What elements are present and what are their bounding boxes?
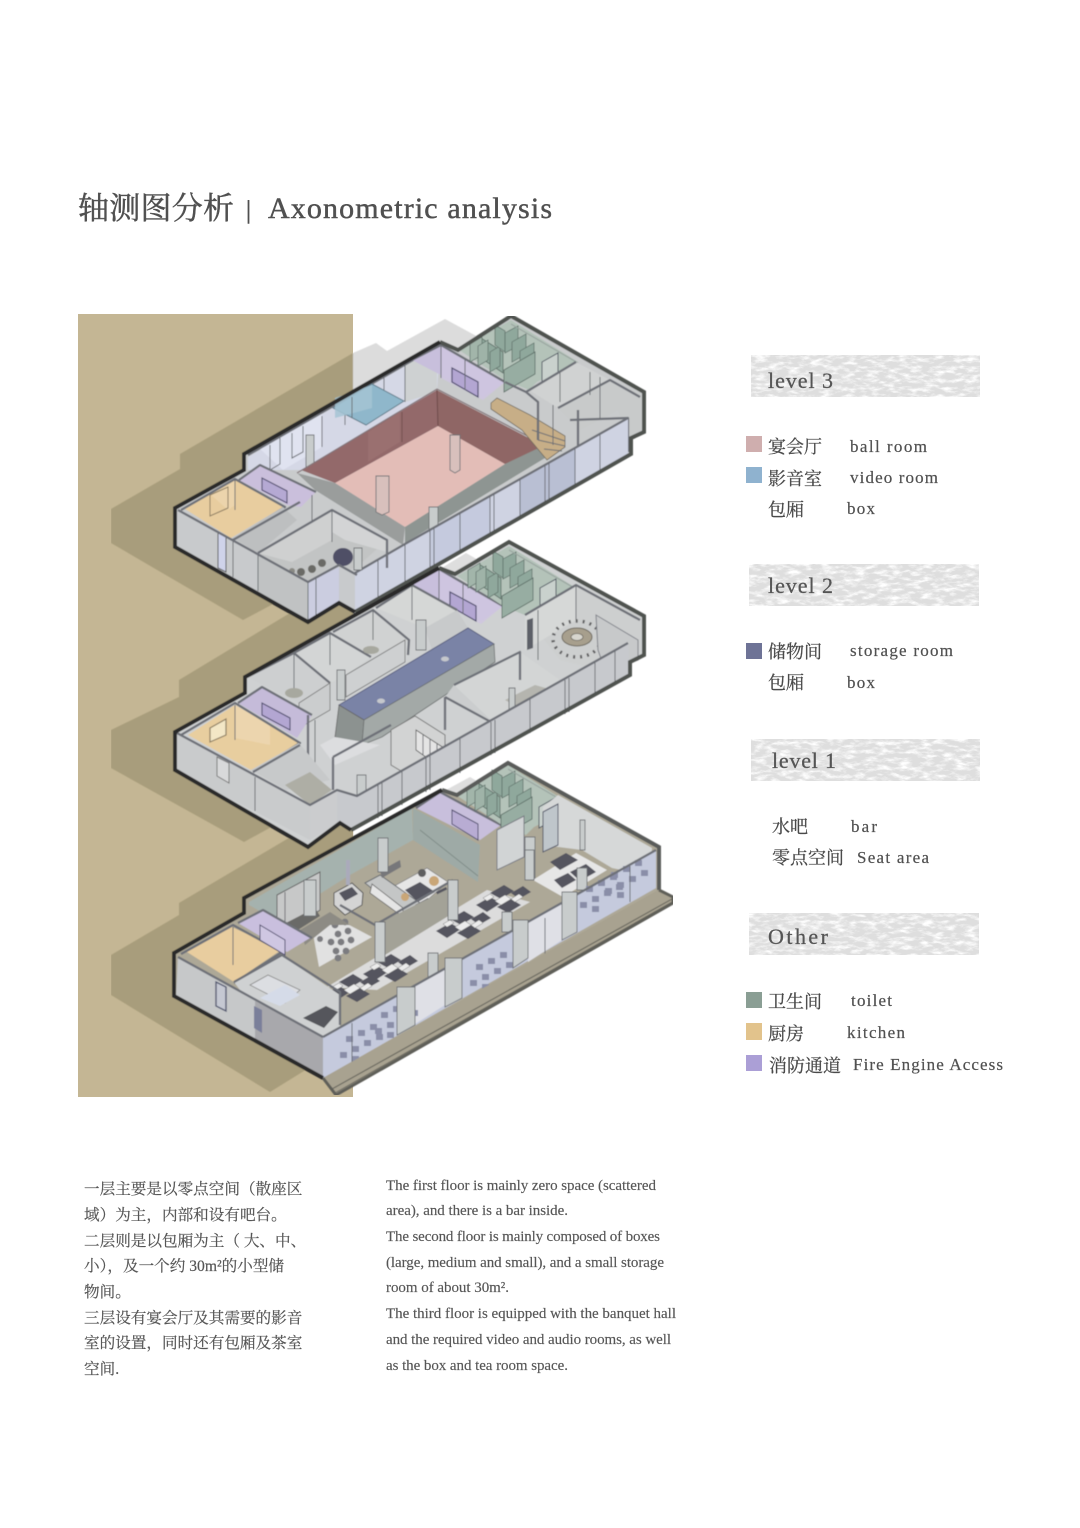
axonometric drawing [111, 316, 673, 1095]
chinese description: 室的设置，同时还有包厢及茶室 [84, 1334, 302, 1352]
cast shadows [111, 319, 482, 1092]
legend: level 3 items: box [847, 499, 876, 518]
legend: level 2 items: box [847, 673, 876, 692]
rear box rooms level 2 [247, 585, 468, 728]
legend: level 3 items: video room [850, 468, 938, 487]
purple access lower level 2 [238, 687, 315, 785]
legend: level 1 items: Seat area [857, 848, 929, 867]
kitchen level 3 [181, 479, 285, 540]
dining clusters level 1 [325, 853, 596, 1002]
legend header: level 1: level 1 [772, 748, 836, 773]
rear glazed rooms [248, 346, 440, 470]
outer walls level 3 [175, 316, 644, 622]
legend header: level 2 [749, 564, 979, 606]
legend: level 1 items: 零点空间 [772, 848, 844, 868]
chinese description: 三层设有宴会厅及其需要的影音 [84, 1309, 302, 1327]
english description: The first floor is mainly zero space (scattered [386, 1178, 656, 1194]
legend header: level 2: level 2 [768, 573, 833, 598]
title: Axonometric analysis [268, 192, 552, 225]
legend header: level 1 [751, 739, 980, 781]
storage room [335, 628, 495, 745]
legend: other items [746, 991, 1003, 1076]
toilets level 3 [459, 320, 578, 392]
banquet room level 2 [525, 585, 642, 670]
chinese description: 一层主要是以零点空间（散座区 [84, 1180, 302, 1198]
room below kitchen level 2 [251, 743, 332, 805]
front glazing level 3 [355, 418, 628, 610]
ballroom walls [301, 390, 438, 483]
floor rugs [312, 853, 607, 990]
front left wall level 3 [177, 510, 357, 620]
english description: area), and there is a bar inside. [386, 1203, 568, 1219]
english description: The second floor is mainly composed of boxes [386, 1229, 660, 1245]
english description: as the box and tea room space. [386, 1358, 568, 1374]
column rear [306, 435, 314, 468]
chinese description: 小），及一个约 30m²的小型储 [84, 1257, 284, 1275]
back of house level 1 [234, 955, 340, 1037]
english description: The third floor is equipped with the banquet hall [386, 1306, 676, 1322]
right rear room level 1 [497, 795, 652, 880]
front wall left level 1 [176, 957, 323, 1078]
legend: other items: 厨房 [768, 1024, 804, 1044]
legend: level 2 items: storage room [850, 641, 953, 660]
toilets level 1 [456, 765, 575, 837]
box rooms level 3 [233, 502, 387, 582]
legend: level 2 items: 包厢 [768, 673, 804, 693]
front wall level 2 [175, 643, 630, 840]
legend: other items: 消防通道 [769, 1056, 841, 1076]
front glazing level 1 [323, 850, 656, 1078]
right rooms level 3 [505, 362, 641, 452]
bar and seating level 1 [334, 860, 450, 917]
bar stools level 1 [317, 919, 354, 961]
legend: level 3 items: 影音室 [768, 469, 822, 489]
legend: other items: toilet [851, 991, 892, 1010]
english description [386, 1178, 676, 1374]
chinese description [84, 1180, 306, 1378]
legend: level 1 items [772, 817, 929, 868]
level 1 floor plan [174, 763, 673, 1095]
legend: level 1 items: bar [851, 817, 877, 836]
legend: other items: kitchen [847, 1023, 906, 1042]
level 3 floor plan [175, 316, 644, 622]
base slab level 3 [175, 316, 644, 622]
ballroom low walls [297, 473, 405, 545]
shelves [491, 398, 565, 460]
level 2 floor plan [175, 542, 644, 847]
bar and corridor level 2 [320, 716, 445, 796]
ledge level 1 [323, 890, 673, 1095]
chinese description: 物间。 [84, 1283, 131, 1301]
legend: level 3 items: 宴会厅 [768, 437, 822, 457]
shelving level 1 [277, 872, 350, 945]
legend: level 2 items [746, 641, 953, 693]
legend: level 2 items: 储物间 [768, 642, 822, 662]
legend header: level 3: level 3 [768, 368, 833, 393]
chinese description: 二层则是以包厢为主（ 大、中、 [84, 1232, 306, 1250]
chinese description: 空间. [84, 1360, 119, 1378]
video room [333, 384, 404, 425]
base slab level 1 [174, 763, 673, 1095]
toilets level 2 [457, 546, 576, 618]
legend header: other [749, 913, 979, 955]
outer walls level 2 [175, 542, 644, 847]
legend header: other: Other [768, 924, 829, 949]
legend: level 3 items: 包厢 [768, 500, 804, 520]
english description: and the required video and audio rooms, as well [386, 1332, 671, 1348]
legend: level 1 items: 水吧 [772, 817, 808, 837]
kitchen level 1 [181, 925, 282, 983]
legend: other items: 卫生间 [768, 992, 822, 1012]
english description: (large, medium and small), and a small storage [386, 1255, 664, 1271]
rear wall level 1 [249, 808, 413, 925]
legend header: level 3 [751, 355, 980, 397]
title [78, 191, 552, 226]
kitchen level 2 [181, 703, 300, 772]
legend: other items: Fire Engine Access [853, 1055, 1003, 1074]
purple access top level 1 [416, 792, 501, 840]
front rooms level 2 [445, 652, 570, 745]
purple access top level 3 [412, 345, 505, 400]
title: | [246, 197, 251, 224]
ballroom floor [335, 426, 505, 527]
purple access top level 2 [410, 569, 503, 624]
outer walls level 1 [174, 763, 673, 1095]
chinese description: 域）为主，内部和设有吧台。 [84, 1206, 287, 1224]
purple access lower level 1 [238, 910, 312, 955]
partition wall with bar counter level 1 [340, 880, 453, 955]
legend: level 3 items: ball room [850, 437, 927, 456]
purple access lower level 3 [239, 465, 316, 522]
title: 轴测图分析 [78, 191, 234, 226]
base slab level 2 [175, 542, 644, 847]
legend: level 3 items [746, 436, 938, 520]
columns level 1 [304, 838, 587, 990]
ballroom columns [376, 435, 460, 530]
english description: room of about 30m². [386, 1280, 509, 1296]
background shadow panel [78, 314, 353, 1097]
